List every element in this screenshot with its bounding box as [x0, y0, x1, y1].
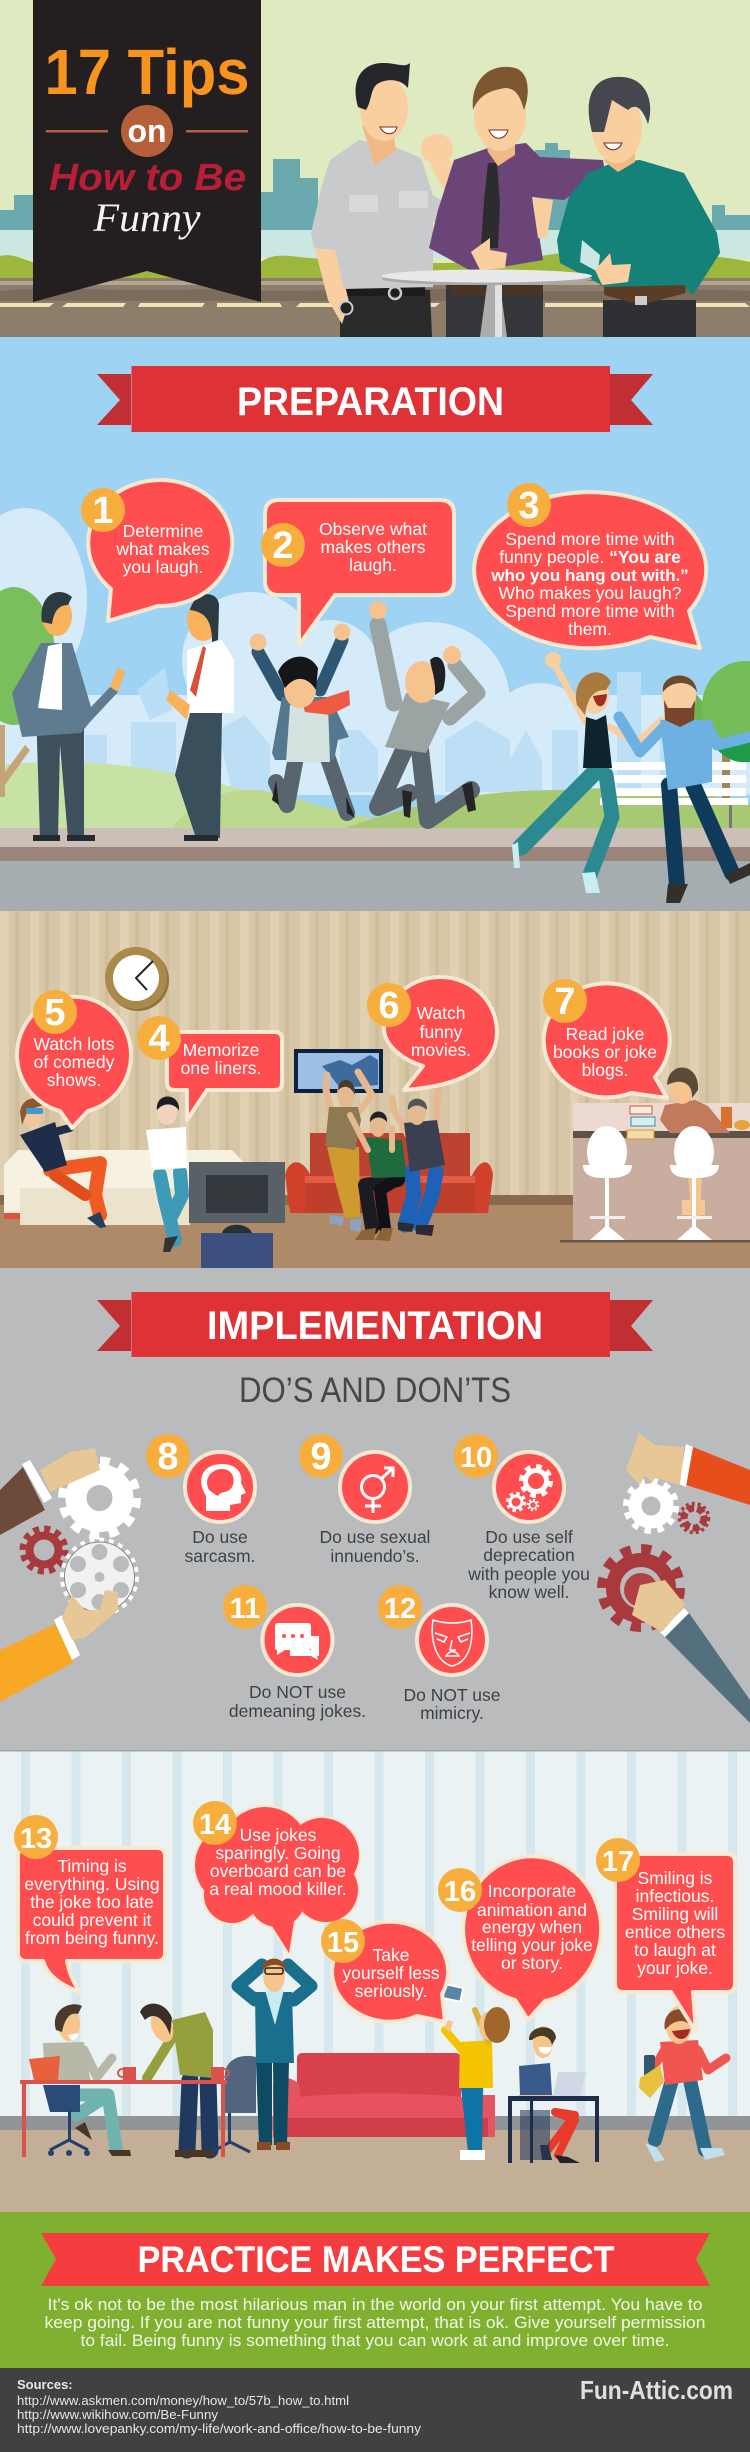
- small red gear: [680, 1504, 708, 1532]
- tip text: Determine: [123, 521, 203, 541]
- tip text: Spend more time with: [505, 529, 675, 549]
- man with jacket: [12, 592, 125, 841]
- sources: Sources:: [17, 2377, 73, 2392]
- tip text: of comedy: [34, 1052, 115, 1072]
- tip text: Do use self: [485, 1527, 573, 1547]
- red office sofa: [273, 2053, 495, 2137]
- tip text: or story.: [501, 1953, 563, 1973]
- tip text: the joke too late: [30, 1892, 154, 1912]
- tip text: what makes: [115, 539, 210, 559]
- tip text: Do use: [192, 1527, 248, 1547]
- tip text: laugh.: [349, 555, 397, 575]
- tip text: know well.: [489, 1582, 569, 1602]
- tip text: Do NOT use: [249, 1682, 346, 1702]
- speech bubble: [195, 1807, 359, 1953]
- tip text: to laugh at: [634, 1940, 716, 1960]
- tip text: seriously.: [355, 1981, 427, 2001]
- road: [0, 278, 750, 337]
- tip text: entice others: [625, 1922, 725, 1942]
- tip text: Watch: [417, 1003, 465, 1023]
- tip text: Observe what: [319, 519, 427, 539]
- standing friend: [325, 1072, 372, 1232]
- arms up friend: [392, 1070, 445, 1236]
- logo: Fun-Attic.com: [580, 2375, 733, 2405]
- friends watching: [325, 1070, 445, 1241]
- number badge: [507, 483, 551, 527]
- tip text: a real mood killer.: [209, 1879, 347, 1899]
- skyline: [0, 143, 750, 230]
- hills: [0, 762, 350, 830]
- number badge: 15: [327, 1927, 359, 1959]
- man with red tie: [166, 594, 234, 841]
- tip text: them.: [568, 619, 612, 639]
- bearded man: [619, 675, 750, 903]
- man in white shirt: [146, 1096, 187, 1252]
- clouds and city: [0, 508, 750, 795]
- speech bubble: [88, 480, 232, 621]
- food and drink: [721, 1107, 750, 1130]
- tip text: with people you: [467, 1564, 590, 1584]
- tip 9: [299, 1434, 430, 1566]
- tip text: demeaning jokes.: [229, 1701, 366, 1721]
- jumping man right: [369, 601, 478, 820]
- stressed man in suit: [238, 1958, 311, 2150]
- tip text: deprecation: [483, 1545, 575, 1565]
- woman with stethoscope: [639, 2006, 726, 2162]
- lower hand: [632, 1580, 750, 1723]
- office chair: [212, 2056, 256, 2152]
- bench: [600, 762, 748, 843]
- divider right: [186, 130, 248, 132]
- number badge: 9: [310, 1436, 332, 1478]
- on badge: [121, 105, 173, 157]
- seated man: [29, 2004, 131, 2156]
- number badge: 2: [272, 525, 294, 567]
- number badge: [193, 1801, 237, 1845]
- speech bubble: [18, 1848, 165, 1992]
- speech bubble: [384, 977, 497, 1090]
- white gear: [626, 1481, 676, 1531]
- speech bubble: [167, 1032, 282, 1120]
- white couch: [4, 1150, 251, 1225]
- closing paragraph: keep going. If you are not funny your first attempt, that is ok. Give yourself permission: [44, 2313, 706, 2332]
- divider left: [46, 130, 108, 132]
- number badge: 6: [378, 985, 400, 1027]
- title: 17 Tips: 17 Tips: [44, 36, 250, 108]
- lower hand: [0, 1590, 118, 1702]
- tip text: blogs.: [582, 1060, 628, 1080]
- on badge: on: [127, 113, 167, 149]
- tip 16: [438, 1856, 601, 2020]
- speech bubble: [17, 997, 131, 1128]
- tip 1: [81, 480, 232, 621]
- icon: angry mask: [417, 1605, 487, 1675]
- tip text: your joke.: [637, 1958, 713, 1978]
- number badge: 11: [230, 1593, 260, 1625]
- tip text: Read joke: [566, 1024, 644, 1044]
- tip text: Do use sexual: [320, 1527, 430, 1547]
- tip 13: [14, 1815, 165, 1992]
- jumping men: [250, 601, 478, 820]
- tip text: Do NOT use: [404, 1685, 500, 1705]
- speech bubble: [463, 1856, 601, 2020]
- number badge: 5: [44, 992, 66, 1034]
- tv set: [189, 1162, 285, 1268]
- jumping man left: [250, 624, 355, 818]
- preparation banner: [97, 366, 653, 432]
- tip text: overboard can be: [210, 1861, 346, 1881]
- practice banner: [41, 2233, 710, 2286]
- coffee mugs: [118, 2067, 229, 2081]
- number badge: [454, 1434, 498, 1478]
- tip text: shows.: [47, 1070, 101, 1090]
- pavement: [0, 828, 750, 848]
- tip text: Who makes you laugh?: [499, 583, 682, 603]
- tip text: innuendo’s.: [330, 1546, 420, 1566]
- upper hand: [626, 1433, 750, 1505]
- speech bubble: [332, 1922, 448, 2022]
- woman taking photo: [443, 1984, 510, 2160]
- title banner: [33, 0, 261, 302]
- tip 17: [596, 1838, 735, 2032]
- red sofa: [285, 1133, 493, 1213]
- paper: [137, 667, 172, 720]
- tip 8: [146, 1434, 255, 1566]
- tip text: funny: [420, 1022, 463, 1042]
- icon: head: [185, 1452, 255, 1522]
- number badge: 14: [199, 1809, 231, 1841]
- icon: chat bubbles: [262, 1605, 332, 1675]
- table: [382, 270, 592, 337]
- tip text: who you hang out with.”: [490, 566, 689, 585]
- number badge: [81, 488, 125, 532]
- number badge: [438, 1868, 482, 1912]
- number badge: [596, 1838, 640, 1882]
- number badge: 8: [157, 1436, 179, 1478]
- film gear: [64, 1541, 136, 1613]
- tip text: yourself less: [342, 1963, 440, 1983]
- number badge: [137, 1016, 181, 1060]
- tip text: Smiling will: [632, 1904, 718, 1924]
- stack of books: [627, 1106, 655, 1139]
- tip text: Timing is: [57, 1856, 127, 1876]
- tip text: makes others: [320, 537, 426, 557]
- tip 12: [378, 1585, 500, 1723]
- man middle: [429, 67, 605, 337]
- title: Funny: Funny: [92, 195, 201, 240]
- coworkers at desk: [20, 2004, 256, 2157]
- man left: [311, 63, 480, 337]
- number badge: 3: [518, 485, 540, 527]
- number badge: 16: [444, 1876, 476, 1908]
- tip 2: [261, 500, 454, 645]
- bushes: [0, 252, 750, 278]
- tip 15: [321, 1919, 448, 2022]
- wall tv: [294, 1049, 383, 1093]
- icon: gender symbol: [340, 1452, 410, 1522]
- closing paragraph: to fail. Being funny is something that you can work at and improve over time.: [80, 2331, 670, 2350]
- tip 7: [543, 979, 670, 1098]
- heading: PREPARATION: [237, 380, 504, 424]
- speech bubble: [615, 1854, 735, 2032]
- tip text: Smiling is: [638, 1868, 713, 1888]
- footer: [0, 2368, 750, 2452]
- tip text: energy when: [482, 1917, 582, 1937]
- bar stool left: [583, 1126, 632, 1240]
- man right: [557, 77, 720, 337]
- tip text: Memorize: [183, 1040, 259, 1060]
- tip 10: [454, 1434, 590, 1602]
- number badge: 12: [384, 1593, 416, 1625]
- sources: http://www.lovepanky.com/my-life/work-and-office/how-to-be-funny: [17, 2421, 422, 2436]
- tip text: from being funny.: [25, 1928, 159, 1948]
- sitting friend: [350, 1112, 407, 1241]
- tip text: Incorporate: [488, 1881, 576, 1901]
- heading: IMPLEMENTATION: [207, 1304, 543, 1348]
- tip 5: [17, 990, 131, 1128]
- heading: PRACTICE MAKES PERFECT: [138, 2239, 615, 2280]
- sources: http://www.askmen.com/money/how_to/57b_how_to.html: [17, 2393, 349, 2408]
- tip text: could prevent it: [33, 1910, 151, 1930]
- tip text: Take: [373, 1945, 409, 1965]
- tip 4: [137, 1016, 282, 1120]
- bar stool right: [670, 1126, 719, 1240]
- icon: gears: [494, 1452, 564, 1522]
- number badge: [223, 1585, 267, 1629]
- man with laptop: [508, 2026, 599, 2163]
- closing panel: [0, 2212, 750, 2368]
- tip text: movies.: [411, 1040, 471, 1060]
- section background: preparation: [0, 337, 750, 911]
- tip text: Watch lots: [33, 1034, 115, 1054]
- implementation banner: [97, 1292, 653, 1357]
- gears and hands left: [0, 1448, 136, 1702]
- big red gear: [602, 1549, 680, 1627]
- desk: [20, 2080, 227, 2157]
- number badge: 7: [554, 981, 576, 1023]
- tip text: funny people. “You are: [499, 547, 681, 567]
- happy couple: [512, 652, 750, 903]
- section background: living room: [0, 911, 750, 1268]
- tip text: mimicry.: [420, 1703, 484, 1723]
- number badge: 10: [460, 1442, 492, 1474]
- white gear: [62, 1461, 136, 1535]
- tip text: one liners.: [181, 1058, 261, 1078]
- woman: [512, 652, 662, 893]
- speech bubble: [265, 500, 454, 645]
- number badge: [261, 523, 305, 567]
- phone: [443, 1984, 463, 2002]
- number badge: 4: [148, 1018, 170, 1060]
- number badge: [14, 1815, 58, 1859]
- tree left: [0, 587, 55, 797]
- speech bubble: [474, 492, 706, 648]
- red gear: [23, 1529, 65, 1571]
- tip text: animation and: [477, 1900, 587, 1920]
- closing paragraph: It's ok not to be the most hilarious man in the world on your first attempt. You have to: [48, 2295, 702, 2314]
- header scene: [0, 0, 750, 337]
- gears and hands right: [602, 1433, 750, 1723]
- man with glasses: [20, 1097, 106, 1228]
- section background: implementation: [0, 1268, 750, 1750]
- section background: office: [0, 1750, 750, 2212]
- tip 14: [193, 1801, 359, 1953]
- number badge: 13: [20, 1823, 52, 1855]
- woman reading: [660, 1068, 730, 1220]
- tip text: books or joke: [553, 1042, 657, 1062]
- tree right: [672, 661, 750, 805]
- people talking: [12, 592, 234, 841]
- wall clock: [105, 947, 169, 1011]
- tip text: sparingly. Going: [215, 1843, 341, 1863]
- title: How to Be: How to Be: [49, 157, 246, 199]
- tip text: everything. Using: [24, 1874, 160, 1894]
- tip text: sarcasm.: [185, 1546, 255, 1566]
- tip 3: [474, 483, 706, 648]
- sources: http://www.wikihow.com/Be-Funny: [17, 2407, 218, 2422]
- kitchen counter: [560, 1068, 750, 1242]
- three laughing men: [311, 63, 720, 337]
- tip text: you laugh.: [123, 557, 203, 577]
- subheading: DO’S AND DON’TS: [239, 1371, 511, 1410]
- tip text: Use jokes: [240, 1825, 317, 1845]
- tip text: Spend more time with: [505, 601, 675, 621]
- number badge: 1: [92, 490, 114, 532]
- number badge: 17: [602, 1846, 634, 1878]
- leaning man: [140, 2004, 215, 2157]
- tip 6: [367, 977, 497, 1090]
- speech bubble: [544, 983, 670, 1098]
- upper hand: [0, 1448, 100, 1535]
- tip 11: [223, 1585, 366, 1721]
- tip text: telling your joke: [471, 1935, 593, 1955]
- tip text: infectious.: [636, 1886, 714, 1906]
